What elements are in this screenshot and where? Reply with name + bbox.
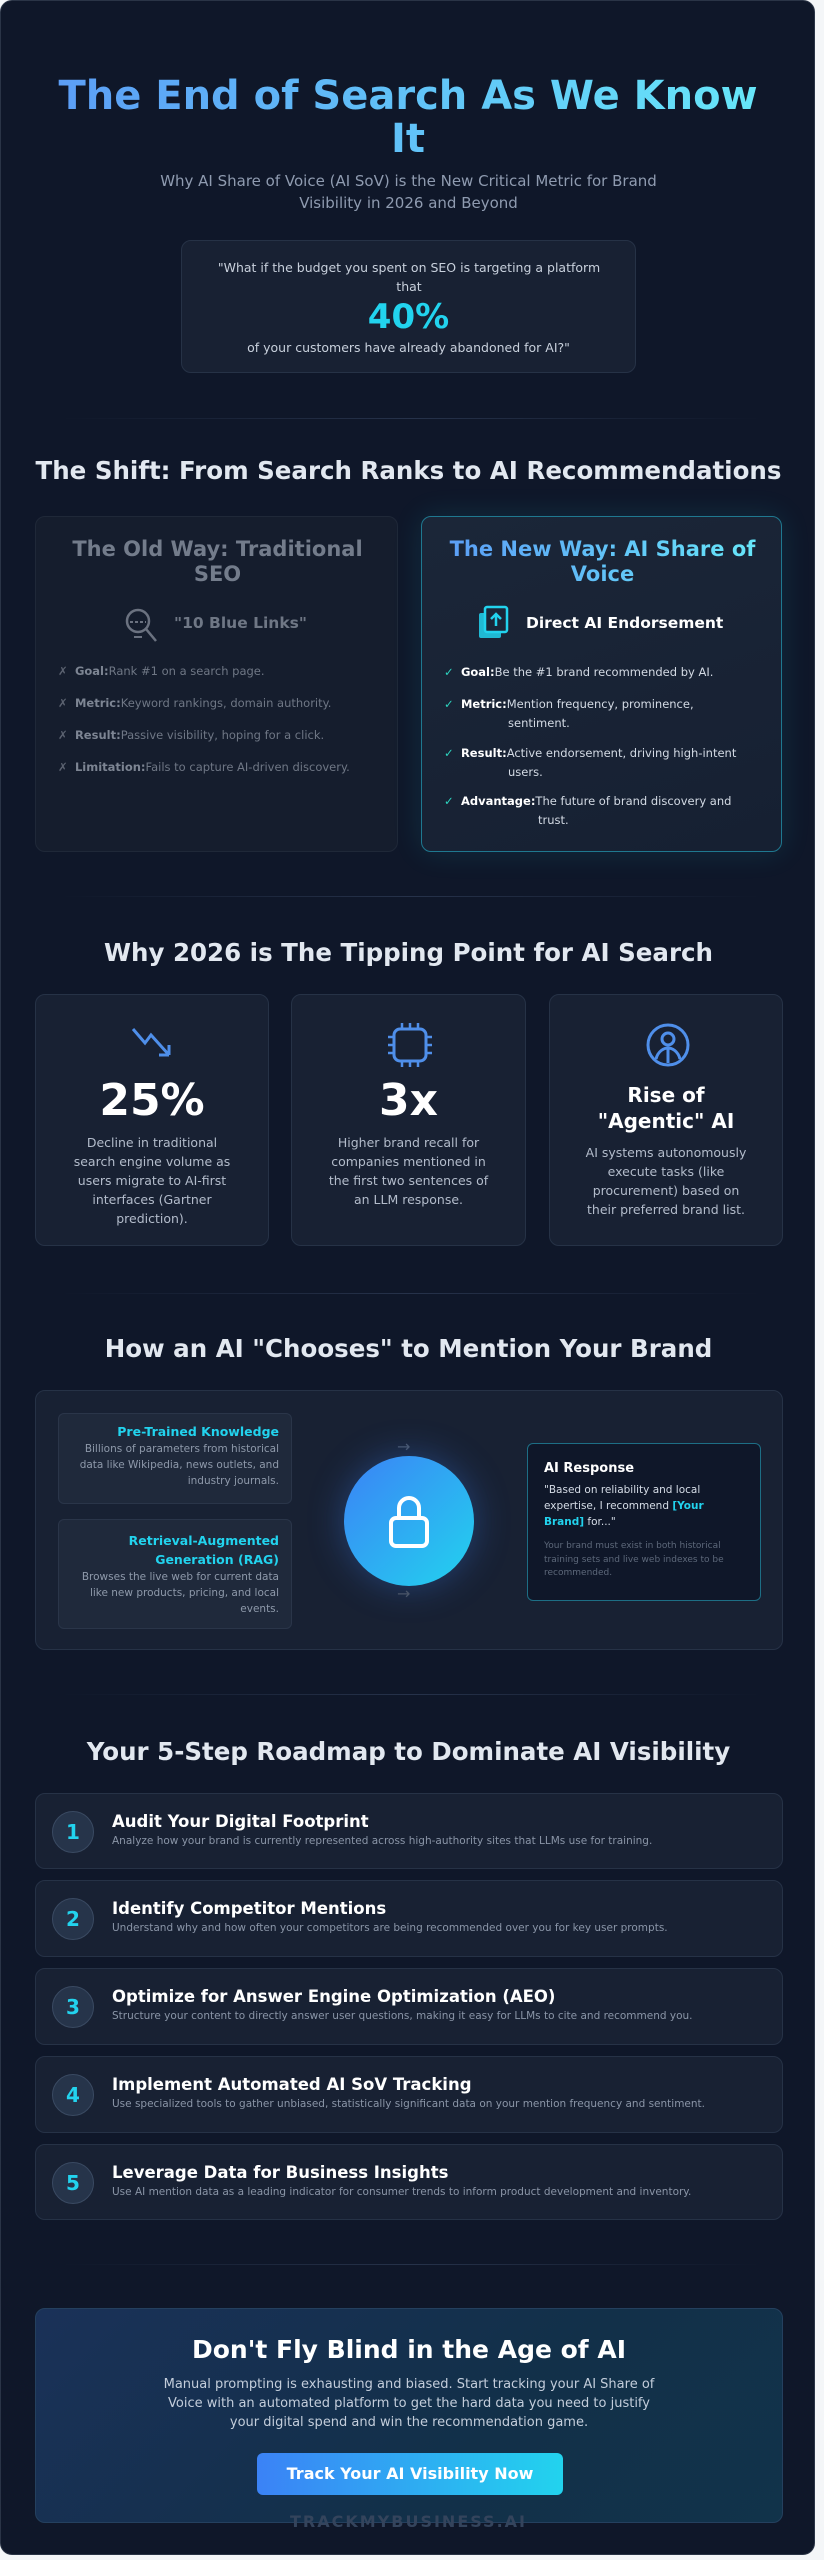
panel: agentic ai: "Agentic" AI (598, 1109, 734, 1133)
step 5: 5 (66, 2171, 80, 2195)
callout: AI response: AI Response (544, 1461, 634, 1476)
panel: new way: sentiment. (508, 716, 570, 730)
panel: old way: ✗ Goal:Rank #1 on a search page. (58, 664, 265, 678)
panel: agentic ai: AI systems autonomously execute tasks (like procurement) based on their preferred brand list. (586, 1145, 746, 1217)
callout: AI response: "Based on reliability and local expertise, I recommend [Your Brand] for..." (544, 1484, 704, 1528)
callout: quote box (181, 240, 636, 373)
icon: trend down (132, 1028, 170, 1056)
step 3 (35, 1968, 783, 2045)
step 2: Identify Competitor Mentions (112, 1899, 386, 1918)
panel: old way (35, 516, 398, 852)
panel: new way: ✓ Result:Active endorsement, driving high-intent (444, 746, 736, 760)
text block: pre-trained knowledge: Pre-Trained Knowledge (117, 1424, 279, 1439)
panel: agentic ai: Rise of (627, 1083, 705, 1107)
panel: CTA (35, 2308, 783, 2523)
panel: CTA: Manual prompting is exhausting and biased. Start tracking your AI Share of Voice with an automated platform to get the hard data you need to justify your digital spend and win the recommendation game. (164, 2377, 654, 2430)
stat: 40%: 40% (368, 297, 449, 337)
step 1: Analyze how your brand is currently represented across high-authority sites that LLMs use for training. (112, 1835, 652, 1847)
arrow: → (397, 1584, 410, 1603)
text block: RAG: Browses the live web for current data like new products, pricing, and local events. (82, 1571, 279, 1615)
panel: new way: trust. (538, 813, 569, 827)
step 5: Use AI mention data as a leading indicator for consumer trends to inform product development and inventory. (112, 2186, 691, 2198)
step 4: Use specialized tools to gather unbiased, statistically significant data on your mention frequency and sentiment. (112, 2098, 705, 2110)
callout: quote box: of your customers have already abandoned for AI?" (247, 340, 570, 355)
step 1: 1 (66, 1820, 80, 1844)
step 5: Leverage Data for Business Insights (112, 2163, 448, 2182)
panel: new way: ✓ Goal:Be the #1 brand recommended by AI. (444, 665, 713, 679)
arrow: → (397, 1437, 410, 1456)
step 4: Implement Automated AI SoV Tracking (112, 2075, 472, 2094)
panel: agentic ai (549, 994, 783, 1246)
panel: AI choice diagram (35, 1390, 783, 1650)
panel: old way: ✗ Limitation:Fails to capture AI-driven discovery. (58, 760, 350, 774)
heading: why 2026: Why 2026 is The Tipping Point for AI Search (104, 938, 713, 967)
step 5 (35, 2144, 783, 2220)
heading: the shift: The Shift: From Search Ranks to AI Recommendations (36, 456, 781, 485)
icon: lock circle (344, 1456, 474, 1586)
button (257, 2453, 563, 2495)
panel: stat 3x: Higher brand recall for companies mentioned in the first two sentences of an LLM response. (329, 1135, 488, 1207)
callout: quote box: "What if the budget you spent on SEO is targeting a platform that (218, 260, 600, 294)
panel: stat 3x (291, 994, 526, 1246)
subtitle: Why AI Share of Voice (AI SoV) is the New Critical Metric for Brand Visibility in 2026 and Beyond (160, 172, 657, 212)
panel: stat 25% (35, 994, 269, 1246)
text block: RAG (58, 1519, 292, 1629)
title: The End of Search As We Know It (58, 73, 758, 162)
icon: chip (388, 1023, 432, 1067)
panel: new way: ✓ Advantage:The future of brand discovery and (444, 794, 731, 808)
step 2: Understand why and how often your competitors are being recommended over you for key user prompts. (112, 1922, 668, 1934)
step 4 (35, 2056, 783, 2133)
panel: new way: ✓ Metric:Mention frequency, prominence, (444, 697, 694, 711)
panel: old way: "10 Blue Links" (174, 614, 307, 632)
panel: new way: Direct AI Endorsement (526, 614, 723, 632)
step 3: Optimize for Answer Engine Optimization (AEO) (112, 1987, 555, 2006)
panel: new way (421, 516, 782, 852)
panel: stat 3x: 3x (379, 1075, 438, 1126)
panel: old way: ✗ Result:Passive visibility, hoping for a click. (58, 728, 324, 742)
icon: agent (646, 1024, 690, 1066)
step 3: Structure your content to directly answer user questions, making it easy for LLMs to cite and recommend you. (112, 2010, 693, 2022)
panel: stat 25%: Decline in traditional search engine volume as users migrate to AI-first interfaces (Gartner prediction). (74, 1135, 230, 1226)
panel: CTA: Don't Fly Blind in the Age of AI (192, 2335, 626, 2364)
button: Track Your AI Visibility Now (287, 2464, 533, 2483)
panel: new way: users. (508, 765, 543, 779)
panel: stat 25%: 25% (99, 1075, 205, 1126)
heading: how an AI chooses: How an AI "Chooses" to Mention Your Brand (105, 1334, 712, 1363)
footer brand: TRACKMYBUSINESS.AI (290, 2512, 527, 2531)
step 4: 4 (66, 2083, 80, 2107)
step 2: 2 (66, 1907, 80, 1931)
panel: new way: The New Way: AI Share of Voice (450, 537, 755, 586)
callout: AI response (527, 1443, 761, 1601)
text block: pre-trained knowledge: Billions of parameters from historical data like Wikipedia, news outlets, and industry journals. (80, 1443, 279, 1487)
icon: magnifier (126, 608, 157, 642)
text block: RAG: Retrieval-Augmented Generation (RAG) (129, 1533, 279, 1567)
step 1: Audit Your Digital Footprint (112, 1812, 369, 1831)
panel: old way: ✗ Metric:Keyword rankings, domain authority. (58, 696, 331, 710)
heading: roadmap: Your 5-Step Roadmap to Dominate AI Visibility (87, 1737, 730, 1766)
text block: pre-trained knowledge (58, 1413, 292, 1504)
step 3: 3 (66, 1995, 80, 2019)
step 1 (35, 1793, 783, 1869)
icon: endorsement (479, 606, 508, 638)
step 2 (35, 1880, 783, 1957)
callout: AI response: Your brand must exist in both historical training sets and live web indexes to be recommended. (544, 1541, 724, 1578)
panel: old way: The Old Way: Traditional SEO (72, 537, 363, 586)
